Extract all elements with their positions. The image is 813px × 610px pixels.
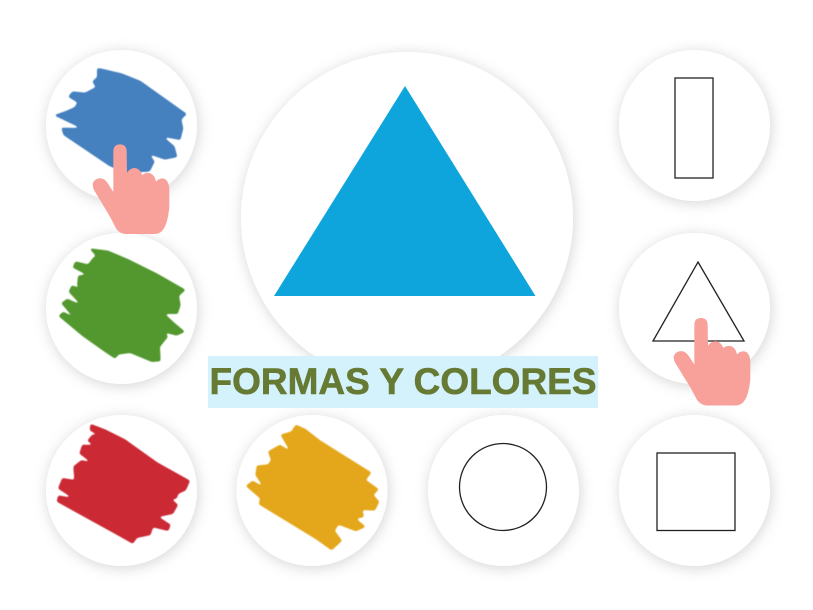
panel: red swatch — [46, 415, 197, 566]
title: FORMAS Y COLORES — [210, 361, 596, 402]
panel: blue swatch — [46, 50, 197, 201]
panel: square shape — [619, 415, 770, 566]
panel: triangle shape — [619, 233, 770, 384]
square outline — [657, 453, 735, 530]
green paint scribble — [59, 249, 185, 361]
panel: main triangle — [241, 52, 573, 384]
circle outline — [460, 444, 546, 530]
rectangle outline — [675, 78, 713, 178]
triangle outline — [653, 262, 744, 341]
big blue triangle — [274, 86, 536, 296]
panel: green swatch — [46, 233, 197, 384]
panel: yellow swatch — [236, 415, 388, 566]
blue paint scribble — [55, 69, 186, 172]
icon: pointing hand on triangle swatch — [674, 318, 750, 405]
panel: circle shape — [428, 415, 579, 566]
panel: rectangle shape — [619, 50, 770, 201]
icon: pointing hand on blue swatch — [93, 144, 169, 234]
yellow paint scribble — [247, 425, 379, 550]
red paint scribble — [57, 425, 189, 543]
